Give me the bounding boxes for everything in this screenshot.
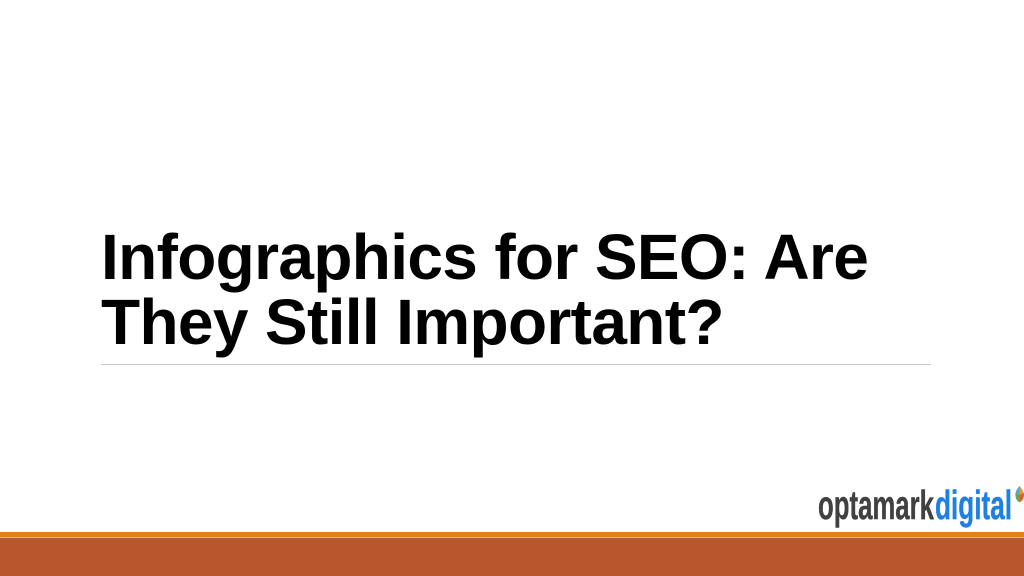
icon: logo leaf	[1015, 486, 1024, 502]
footer band: orange	[0, 532, 1024, 537]
logo wordmark: optamark: optamark	[818, 482, 934, 528]
logo: optamarkdigital	[818, 482, 1024, 528]
title: Infographics for SEO: Are	[101, 221, 868, 293]
title: They Still Important?	[101, 286, 724, 358]
footer band: brown	[0, 538, 1024, 576]
title	[101, 221, 868, 358]
